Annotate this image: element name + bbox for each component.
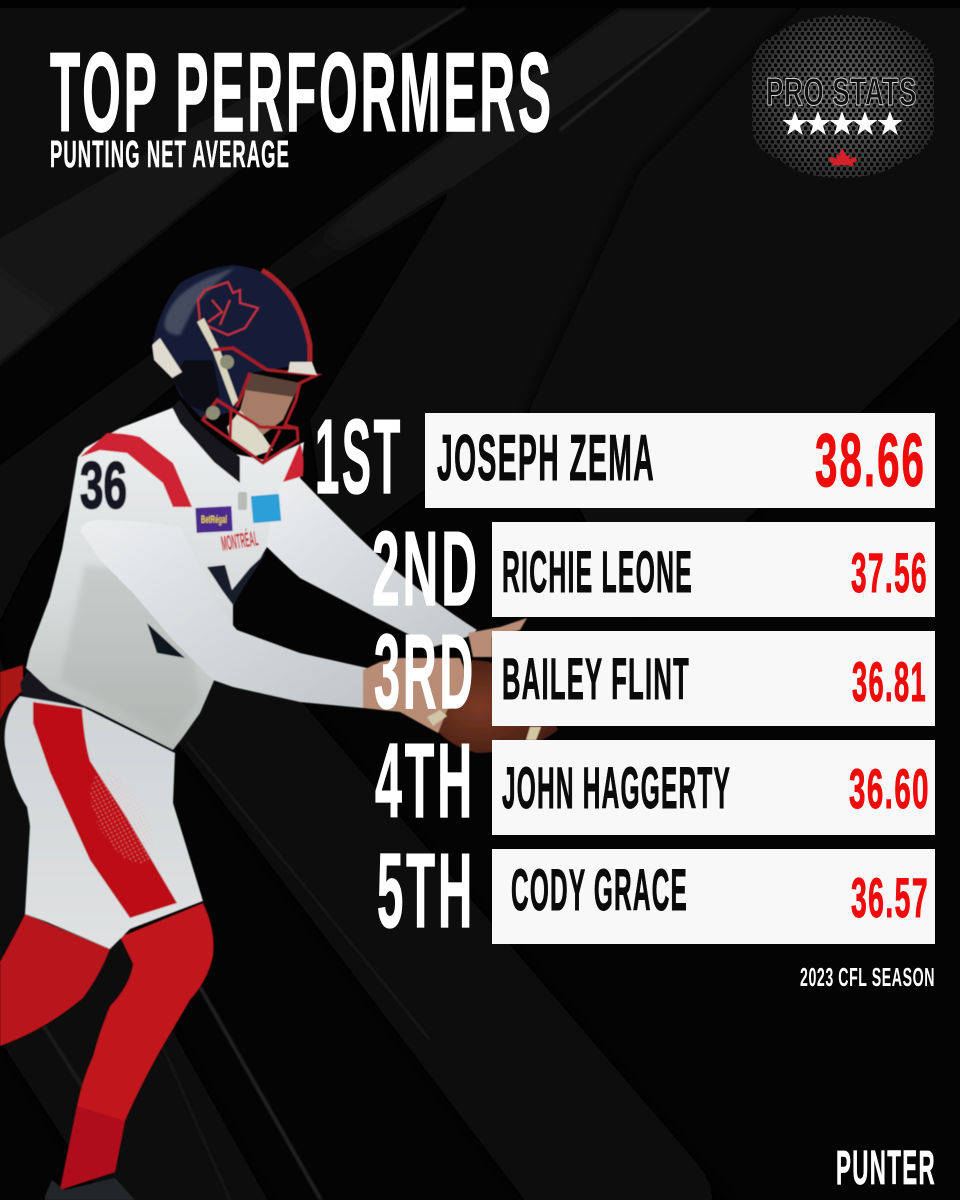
row 2: Richie Leone [372,510,935,628]
sponsor patch purple [195,506,233,533]
ear pad [152,338,182,378]
row 2: Richie Leone: RICHIE LEONE [502,540,693,605]
black jaw pad [172,360,220,412]
row 4: John Haggerty: 4TH [375,722,475,840]
facemask [203,348,317,463]
football lace stripe [526,727,541,740]
row 1: Joseph Zema [315,398,935,516]
mesh shading [60,565,200,735]
jersey [26,408,304,750]
row 5: Cody Grace: 5TH [377,832,475,950]
shoe [45,1178,135,1200]
helmet [152,265,312,420]
sponsor text: BetRégal [201,514,227,526]
face [240,373,300,435]
row 1: Joseph Zema: 1ST [315,398,403,516]
near arm [80,520,367,708]
jersey number 36: 36 [80,448,127,522]
row 3: Bailey Flint: 3RD [374,613,476,731]
far arm [267,478,477,647]
row 3: Bailey Flint [374,613,935,731]
collar [172,400,240,483]
row 3: Bailey Flint: BAILEY FLINT [502,647,690,712]
player: punter number 36: MONTRÉAL [220,527,260,556]
red shorts stripe [33,702,177,918]
back leg [0,914,110,1046]
belt [20,672,90,708]
row 1: Joseph Zema: JOSEPH ZEMA [437,421,655,494]
CFL badge [238,492,247,510]
sock [60,1106,125,1190]
row 5: Cody Grace [377,832,935,950]
rank list [315,398,935,950]
row 2: Richie Leone: 2ND [372,510,480,628]
forehead shadow [245,373,300,397]
logo stars [782,111,902,135]
poster: PUNTING NET AVERAGE [50,134,290,176]
row 4: John Haggerty [375,722,935,840]
sponsor patch blue [251,494,281,523]
helmet clips [220,355,234,369]
helmet strap [197,318,238,406]
football seam on hand [427,710,447,726]
shoulder stripe left [80,433,192,507]
helmet red stripe [262,270,310,362]
chin cup [227,410,273,457]
red towel at waist [0,665,23,720]
shoulder stripe right [283,443,304,482]
player: punter number 36 [0,265,558,1200]
helmet logo [198,282,258,335]
jersey dark panel [207,552,267,605]
football [427,660,558,753]
helmet gloss [165,268,235,335]
logo maple leaf [829,148,857,166]
mesh patch [77,763,167,873]
upper hand [468,618,527,657]
logo: pro stats [752,15,934,178]
helmet front bumper [288,362,317,375]
row 5: Cody Grace: CODY GRACE [511,858,688,923]
front leg [60,903,214,1190]
jersey dark side panel [147,623,185,658]
shorts [5,696,203,949]
lower hand [363,658,470,733]
